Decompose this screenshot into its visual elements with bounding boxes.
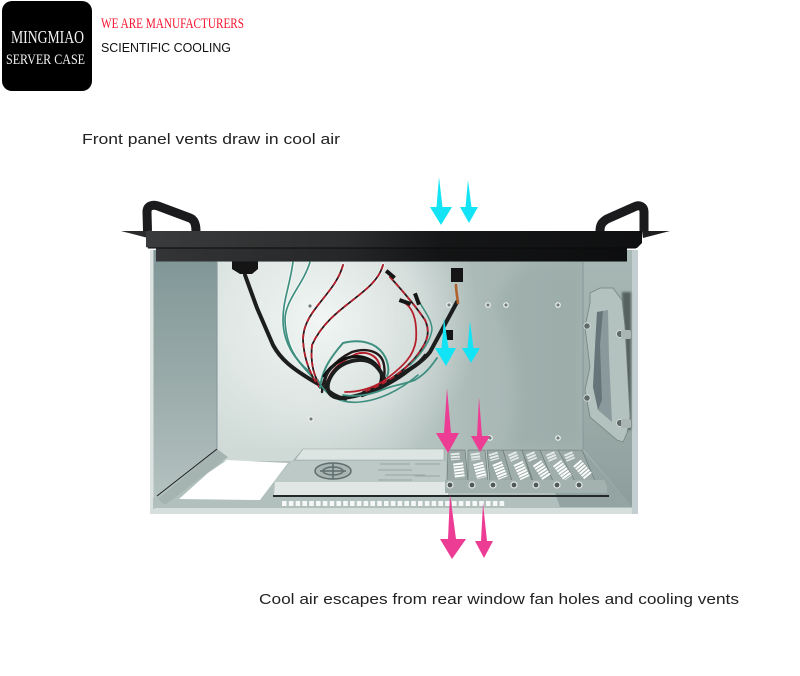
right floor shade: [540, 450, 632, 507]
wire halo: [283, 262, 383, 388]
arrow: air out 2: [471, 397, 490, 452]
upper coil: [320, 341, 388, 388]
arrow: air out 3: [440, 494, 466, 559]
right wall: [583, 250, 633, 510]
logo badge: SERVER CASE: [6, 52, 85, 68]
green tail: [343, 358, 437, 396]
connector wires: [363, 277, 428, 392]
left ear: [121, 231, 148, 238]
arrow: cool air in 3: [435, 318, 456, 366]
back wall: [217, 255, 583, 450]
fan tray: [273, 461, 446, 483]
back wall highlight: [218, 262, 518, 450]
front panel: [146, 231, 642, 248]
floor back fold: [205, 449, 303, 461]
left handle: [147, 205, 196, 231]
heading: manufacturers: WE ARE MANUFACTURERS: [101, 16, 244, 32]
arrow: cool air in 1: [430, 177, 452, 225]
wire bundle: [245, 262, 458, 402]
black rail: [273, 495, 609, 497]
logo badge: [2, 1, 92, 91]
logo badge: MINGMIAO: [11, 27, 84, 47]
arrow: air out 4: [475, 503, 493, 558]
black coil loop: [328, 302, 457, 398]
subheading: scientific cooling: SCIENTIFIC COOLING: [101, 41, 231, 55]
arrow: cool air in 2: [460, 180, 478, 223]
floor left seam: [157, 449, 217, 496]
rear bracket: [584, 288, 631, 442]
drive cutout: [179, 460, 288, 500]
arrow: air out 1: [436, 388, 459, 453]
back wall shadow: [495, 262, 583, 450]
power cable: [245, 275, 345, 399]
caption: front panel: Front panel vents draw in cool air: [82, 131, 340, 148]
right handle: [600, 206, 644, 231]
slot upper perforations: [455, 453, 571, 460]
server case photo: [121, 205, 670, 514]
left wall: [153, 250, 218, 510]
tray rail lower: [274, 482, 448, 495]
slot bar: [445, 480, 607, 493]
floor: [153, 449, 632, 510]
connectors: [232, 261, 463, 340]
wall screws: [308, 303, 560, 440]
front lip: [150, 508, 632, 514]
tray rail upper: [295, 449, 444, 460]
right ear: [642, 231, 670, 238]
red and black wires: [303, 265, 343, 388]
slot perforations: [458, 463, 588, 478]
left floor ledge: [158, 449, 228, 505]
caption: rear exhaust: Cool air escapes from rear window fan holes and cooling vents: [259, 591, 739, 608]
green wires: [283, 262, 323, 388]
front panel lower: [156, 248, 627, 262]
right edge trim: [632, 250, 638, 514]
wall seam: [217, 262, 583, 450]
fan grill: [315, 463, 351, 479]
vent slot row: [282, 501, 505, 506]
arrow: cool air in 4: [462, 321, 480, 363]
tray engraving: [378, 464, 440, 480]
expansion slots: [445, 450, 607, 493]
left edge trim: [150, 250, 154, 514]
slot screws: [447, 482, 582, 488]
